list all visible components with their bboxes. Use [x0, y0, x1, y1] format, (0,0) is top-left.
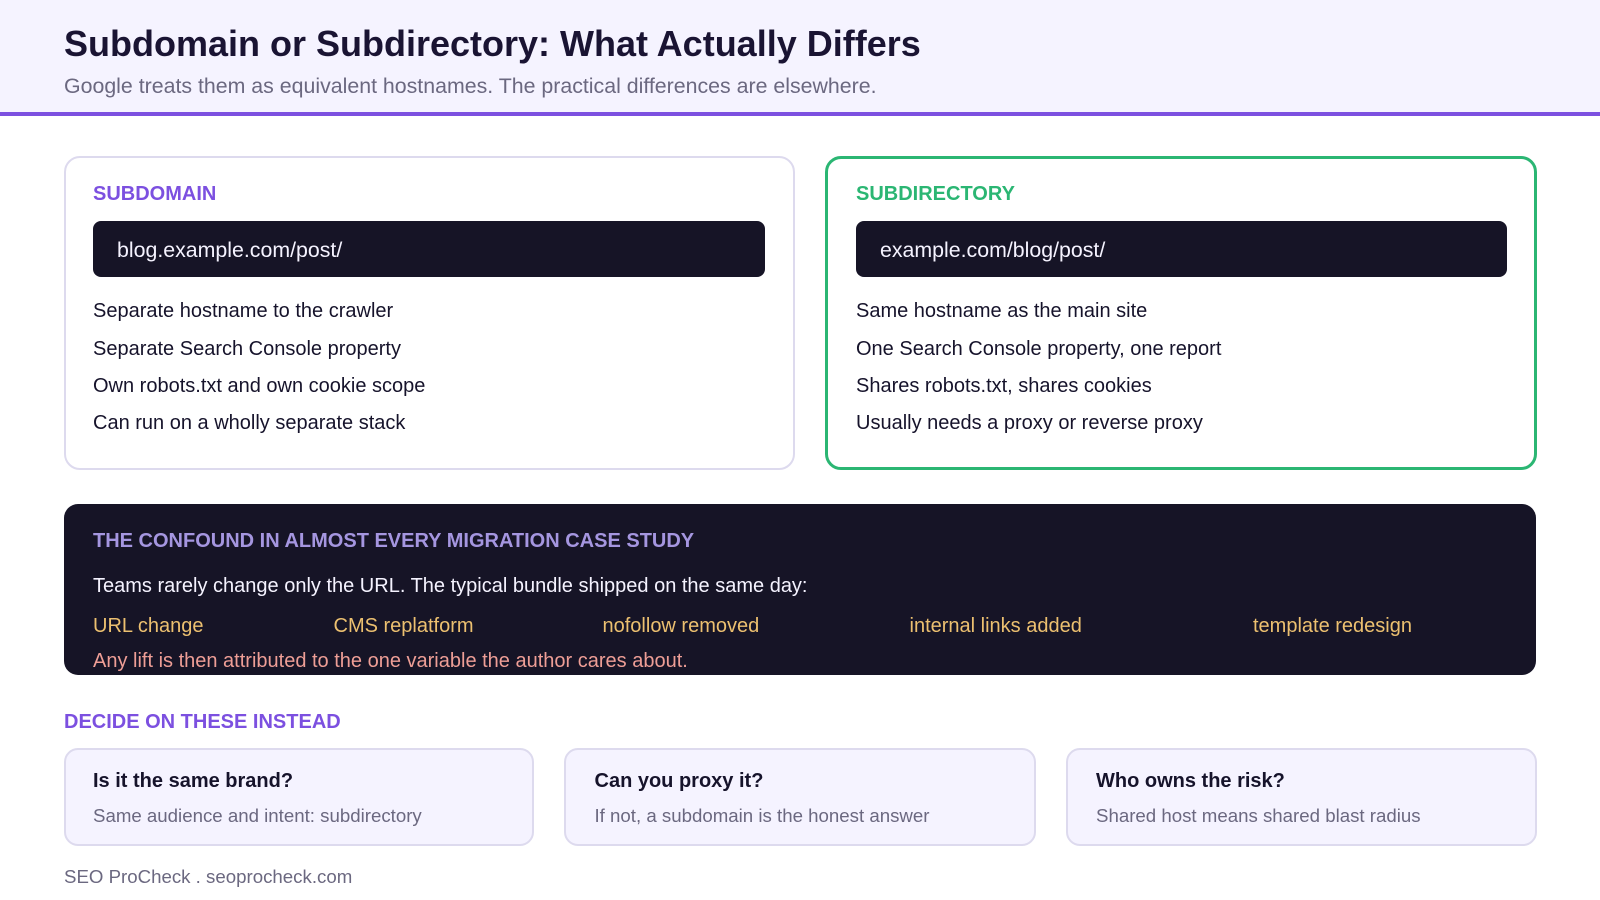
card title: Can you proxy it?	[594, 770, 763, 792]
subdirectory heading: SUBDIRECTORY	[856, 183, 1015, 205]
subdomain facts: Separate Search Console property	[93, 338, 401, 360]
confound conclusion: Any lift is then attributed to the one variable the author cares about.	[93, 650, 688, 672]
subdomain url bar	[93, 220, 765, 276]
subdirectory facts: Same hostname as the main site	[856, 300, 1147, 322]
subdomain heading: SUBDOMAIN	[93, 182, 216, 204]
card text: Same audience and intent: subdirectory	[93, 804, 422, 826]
card text: If not, a subdomain is the honest answer	[594, 804, 929, 826]
bundle list: nofollow removed	[602, 615, 759, 637]
card title: Who owns the risk?	[1096, 770, 1285, 792]
card: risk	[1066, 748, 1537, 846]
card text: Shared host means shared blast radius	[1096, 804, 1421, 826]
card title: Is it the same brand?	[93, 770, 293, 792]
bundle list	[93, 615, 1412, 637]
subdirectory url bar: example.com/blog/post/	[880, 238, 1105, 262]
subdomain facts	[93, 300, 425, 434]
subdomain facts: Own robots.txt and own cookie scope	[93, 374, 425, 396]
subdirectory facts: Shares robots.txt, shares cookies	[856, 375, 1152, 397]
subdirectory url bar	[856, 221, 1507, 277]
panel: confound	[64, 504, 1536, 675]
title: Subdomain or Subdirectory: What Actually Differs	[64, 23, 921, 64]
bundle list: internal links added	[910, 615, 1082, 637]
footer: SEO ProCheck . seoprocheck.com	[64, 866, 352, 887]
bundle list: template redesign	[1253, 615, 1412, 637]
header band	[0, 0, 1600, 116]
subdomain url bar: blog.example.com/post/	[117, 238, 342, 262]
confound heading: THE CONFOUND IN ALMOST EVERY MIGRATION CASE STUDY	[93, 530, 694, 552]
subdirectory facts: One Search Console property, one report	[856, 338, 1221, 360]
card: proxy	[564, 748, 1036, 846]
bundle list: URL change	[93, 615, 203, 637]
subdirectory facts: Usually needs a proxy or reverse proxy	[856, 412, 1203, 434]
bundle list: CMS replatform	[334, 615, 474, 637]
section heading: decide: DECIDE ON THESE INSTEAD	[64, 711, 341, 733]
subdomain facts: Separate hostname to the crawler	[93, 300, 393, 322]
subtitle: Google treats them as equivalent hostnames. The practical differences are elsewhere.	[64, 74, 876, 98]
confound intro: Teams rarely change only the URL. The typical bundle shipped on the same day:	[93, 575, 808, 597]
panel: subdomain	[64, 156, 795, 470]
subdomain facts: Can run on a wholly separate stack	[93, 412, 405, 434]
panel: subdirectory	[825, 156, 1537, 470]
card: same brand	[64, 748, 534, 846]
subdirectory facts	[856, 300, 1222, 434]
